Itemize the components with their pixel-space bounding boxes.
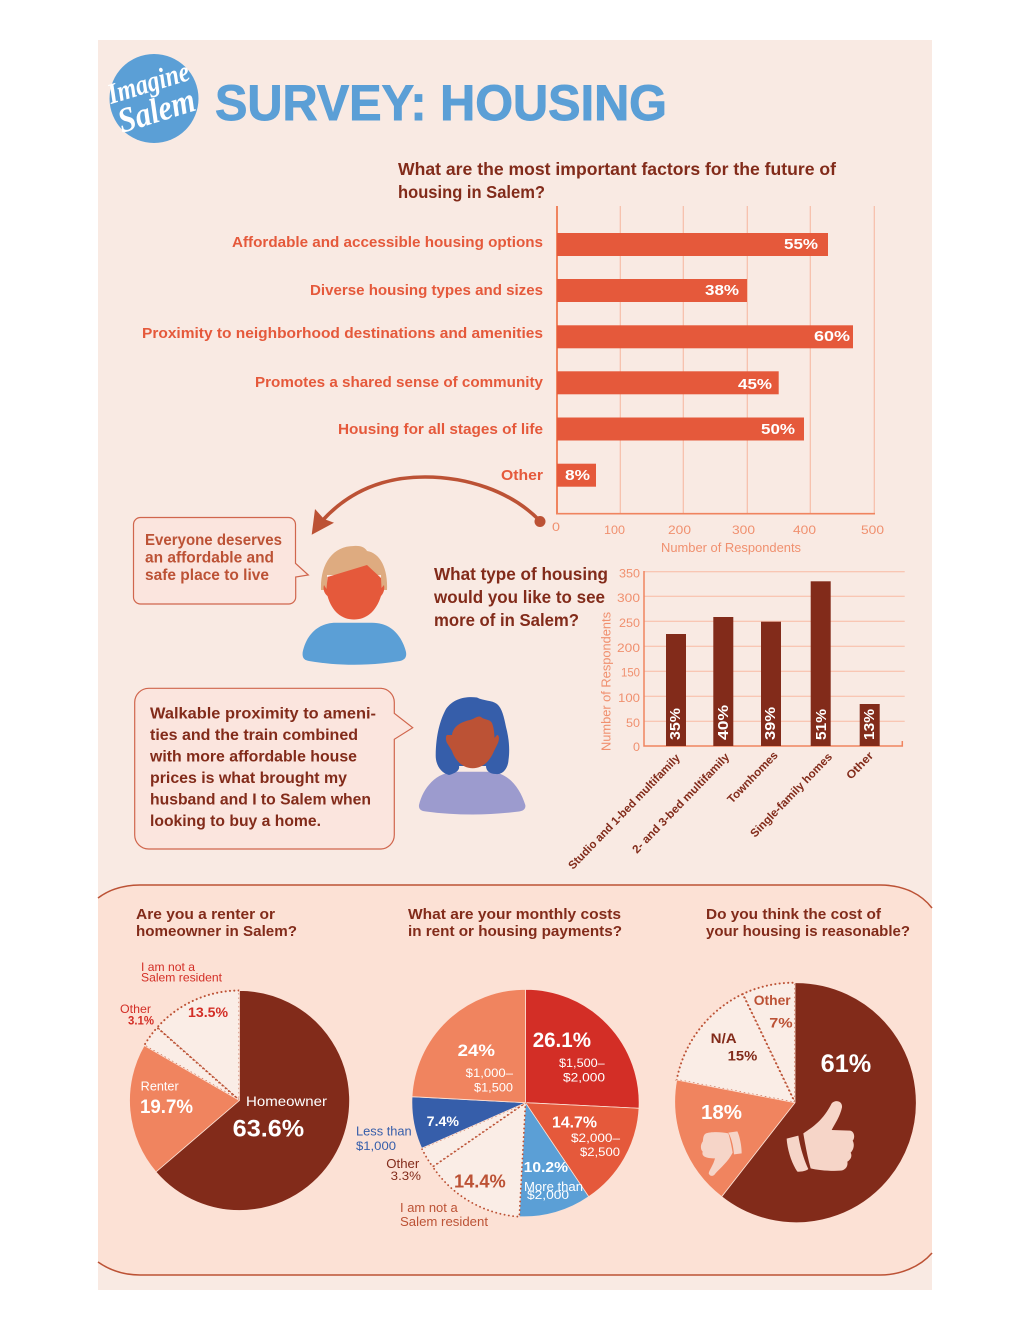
category labels: Single-family homes bbox=[749, 751, 835, 840]
category labels bbox=[142, 234, 544, 484]
bar values bbox=[668, 705, 878, 740]
category labels: Promotes a shared sense of community bbox=[255, 374, 544, 391]
heading: monthly costs: What are your monthly costs bbox=[408, 906, 621, 923]
pie chart: cost reasonable: 7% bbox=[769, 1014, 793, 1030]
heading: monthly costs: in rent or housing payments? bbox=[408, 923, 622, 940]
x axis labels: 200 bbox=[668, 523, 691, 537]
heading: important factors bbox=[398, 159, 836, 202]
heading: renter or homeowner bbox=[136, 906, 297, 940]
y axis labels: 300 bbox=[617, 591, 640, 605]
bar values: 35% bbox=[668, 708, 684, 740]
title: SURVEY: HOUSING bbox=[215, 75, 667, 131]
y axis labels: Number of Respondents bbox=[600, 612, 614, 751]
pie chart: renter or homeowner: 19.7% bbox=[140, 1097, 193, 1118]
page background bbox=[98, 40, 932, 1290]
pie chart: monthly costs: Salem resident bbox=[400, 1214, 488, 1229]
arrow: from Other bar to quote bbox=[312, 477, 546, 535]
bar chart: important factors bbox=[142, 206, 884, 555]
pie chart: renter or homeowner: 63.6% bbox=[233, 1116, 304, 1142]
y axis labels: 350 bbox=[619, 566, 640, 580]
pie chart: cost reasonable: 15% bbox=[728, 1048, 758, 1064]
heading: cost reasonable: Do you think the cost of bbox=[706, 906, 882, 923]
y axis labels: 200 bbox=[617, 641, 640, 655]
heading: cost reasonable bbox=[706, 906, 910, 940]
x axis labels: 500 bbox=[861, 523, 884, 537]
icon: thumbs down bbox=[701, 1131, 742, 1176]
category labels: Studio and 1-bed multifamily bbox=[567, 752, 683, 872]
pie chart: monthly costs: I am not a bbox=[400, 1200, 458, 1215]
category labels: Diverse housing types and sizes bbox=[310, 282, 543, 299]
bar values: 45% bbox=[738, 376, 772, 393]
pie chart: monthly costs bbox=[356, 989, 639, 1229]
pie chart: cost reasonable: 18% bbox=[701, 1102, 742, 1124]
pie chart: monthly costs: 10.2% bbox=[524, 1160, 568, 1176]
pie chart: monthly costs: $2,000 bbox=[563, 1071, 605, 1085]
pie chart: monthly costs: 3.3% bbox=[391, 1169, 421, 1183]
callout: everyone deserves: safe place to live bbox=[145, 567, 269, 584]
bar values bbox=[565, 236, 850, 484]
x axis labels bbox=[552, 520, 884, 555]
bar values: 39% bbox=[763, 707, 779, 740]
heading: type of housing: would you like to see bbox=[433, 587, 605, 607]
callout: everyone deserves bbox=[134, 518, 308, 604]
heading: important factors: What are the most important factors for the future of bbox=[398, 159, 836, 179]
category labels: 2- and 3-bed multifamily bbox=[631, 751, 733, 856]
icon: thumbs up bbox=[787, 1101, 854, 1172]
callout: walkable proximity: husband and I to Salem when bbox=[150, 792, 371, 808]
bar values: 8% bbox=[565, 467, 590, 484]
x axis labels: 100 bbox=[604, 523, 625, 537]
x axis labels: 300 bbox=[732, 523, 755, 537]
heading: type of housing: What type of housing bbox=[434, 564, 608, 584]
category labels: Housing for all stages of life bbox=[338, 421, 543, 438]
y axis labels: 0 bbox=[633, 740, 640, 754]
pie chart: cost reasonable: N/A bbox=[711, 1030, 737, 1046]
bars bbox=[666, 581, 880, 746]
pie chart: monthly costs: 24% bbox=[458, 1041, 495, 1060]
category labels: Affordable and accessible housing options bbox=[232, 234, 543, 251]
category labels: Other bbox=[845, 750, 876, 782]
x axis labels: 0 bbox=[552, 520, 560, 534]
bar values: 50% bbox=[761, 421, 795, 438]
pie chart: renter or homeowner: Renter bbox=[141, 1080, 179, 1094]
category labels: Proximity to neighborhood destinations and amenities bbox=[142, 325, 543, 342]
y axis labels: 250 bbox=[619, 616, 640, 630]
heading: monthly costs bbox=[408, 906, 622, 940]
pie chart: monthly costs: $2,000– bbox=[571, 1131, 620, 1145]
callout: everyone deserves: Everyone deserves bbox=[145, 532, 282, 549]
heading: important factors: housing in Salem? bbox=[398, 182, 545, 202]
pie chart: cost reasonable bbox=[675, 983, 916, 1223]
pie chart: monthly costs: 26.1% bbox=[533, 1029, 591, 1052]
heading: cost reasonable: your housing is reasonable? bbox=[706, 923, 910, 940]
callout: walkable proximity: with more affordable house bbox=[149, 748, 357, 766]
heading: type of housing bbox=[433, 564, 608, 630]
logo: Imagine Salem bbox=[103, 54, 200, 143]
panel: lower pie charts bbox=[98, 885, 932, 1275]
pie chart: monthly costs: $2,000 bbox=[527, 1188, 569, 1202]
pie chart: monthly costs: 7.4% bbox=[427, 1114, 459, 1129]
bar values: 60% bbox=[814, 328, 850, 345]
pie chart: cost reasonable: 61% bbox=[821, 1050, 871, 1078]
pie chart: renter or homeowner: Salem resident bbox=[141, 970, 223, 984]
pie chart: monthly costs: $1,500 bbox=[474, 1081, 513, 1095]
pie chart: renter or homeowner: 13.5% bbox=[188, 1005, 228, 1020]
pie chart: monthly costs: More than bbox=[524, 1180, 583, 1194]
heading: renter or homeowner: Are you a renter or bbox=[136, 906, 275, 923]
pie chart: renter or homeowner: I am not a bbox=[141, 960, 195, 974]
pie chart: monthly costs: $1,000– bbox=[466, 1066, 513, 1080]
x axis labels: 400 bbox=[793, 523, 816, 537]
category labels: Townhomes bbox=[726, 750, 781, 806]
callout: walkable proximity bbox=[135, 688, 413, 849]
x axis labels: Number of Respondents bbox=[661, 540, 801, 555]
y axis labels: 150 bbox=[621, 666, 640, 680]
y axis labels: 100 bbox=[618, 691, 640, 705]
callout: walkable proximity: looking to buy a home. bbox=[150, 813, 321, 830]
icon: woman avatar bbox=[419, 697, 525, 814]
pie chart: monthly costs: $1,500– bbox=[559, 1056, 605, 1070]
heading: renter or homeowner: homeowner in Salem? bbox=[136, 923, 297, 940]
pie chart: monthly costs: Other bbox=[386, 1157, 419, 1171]
pie chart: cost reasonable: Other bbox=[754, 992, 791, 1008]
bar values: 51% bbox=[814, 709, 830, 740]
logo: Imagine Salem: Salem bbox=[113, 80, 200, 141]
y axis labels: 50 bbox=[626, 716, 640, 730]
category labels bbox=[567, 750, 876, 872]
callout: walkable proximity: Walkable proximity to ameni- bbox=[150, 706, 376, 722]
pie chart: monthly costs: Less than bbox=[356, 1124, 412, 1138]
logo: Imagine Salem: Imagine bbox=[103, 56, 193, 111]
y axis labels bbox=[600, 566, 640, 754]
bar values: 40% bbox=[716, 705, 732, 740]
category labels: Other bbox=[501, 467, 543, 484]
icon: man avatar bbox=[303, 546, 406, 665]
pie chart: monthly costs: 14.4% bbox=[454, 1172, 506, 1192]
callout: walkable proximity: ties and the train combined bbox=[150, 727, 358, 744]
bar values: 13% bbox=[862, 709, 878, 740]
bars bbox=[557, 233, 853, 487]
callout: walkable proximity: prices is what brought my bbox=[150, 770, 347, 787]
pie chart: monthly costs: $1,000 bbox=[356, 1139, 396, 1153]
bar values: 55% bbox=[784, 236, 818, 253]
pie chart: monthly costs: $2,500 bbox=[580, 1145, 620, 1159]
callout: everyone deserves: an affordable and bbox=[145, 550, 274, 567]
bar values: 38% bbox=[705, 282, 739, 299]
pie chart: renter or homeowner: Other bbox=[120, 1002, 151, 1016]
pie chart: renter or homeowner: 3.1% bbox=[128, 1014, 154, 1028]
pie chart: renter or homeowner bbox=[120, 960, 350, 1210]
pie chart: monthly costs: 14.7% bbox=[552, 1114, 597, 1132]
pie chart: renter or homeowner: Homeowner bbox=[246, 1093, 327, 1109]
heading: type of housing: more of in Salem? bbox=[434, 610, 579, 630]
bar chart: type of housing bbox=[567, 566, 905, 872]
